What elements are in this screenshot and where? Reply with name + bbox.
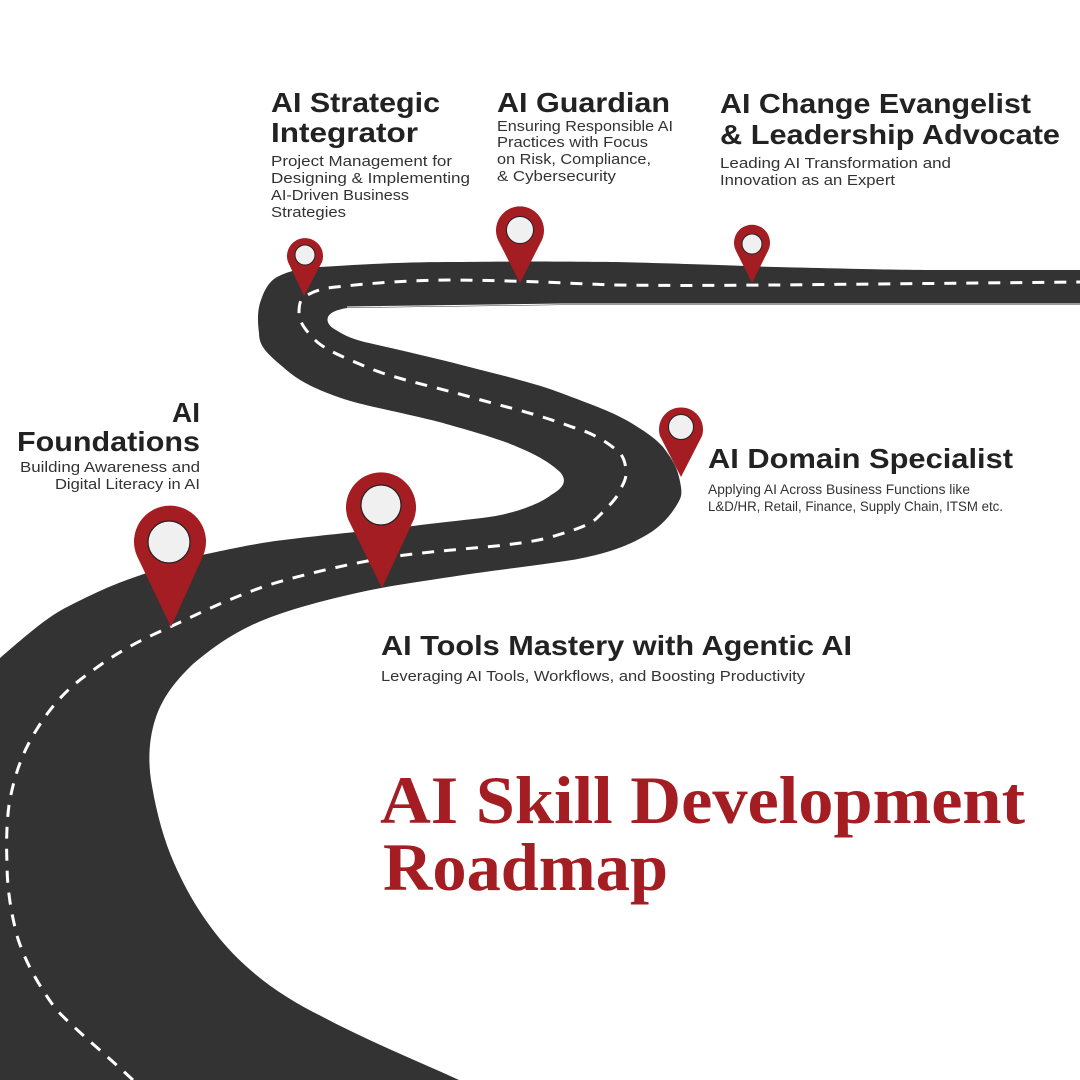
text: AI Domain Specialist [708,443,1013,514]
text: AI Tools Mastery [381,630,852,685]
text: AI Guardian: & Cybersecurity [497,169,617,185]
text: AI Guardian: AI Guardian [497,87,670,118]
text: AI Foundations [17,397,200,493]
text: AI Strategic Integrator: Project Management for [271,153,452,170]
title: AI Skill Development [380,762,1025,838]
text: AI Guardian: Ensuring Responsible AI [497,119,673,135]
text: AI Strategic Integrator: Integrator [271,117,418,148]
text: AI Change Evangelist: & Leadership Advocate [720,119,1060,150]
road center dashed line [7,280,1080,1080]
text: AI Domain Specialist: L&D/HR, Retail, Finance, Supply Chain, ITSM etc. [708,498,1003,514]
text: AI Guardian [497,87,673,185]
text: AI Guardian: Practices with Focus [497,135,648,151]
text: AI Strategic Integrator: Strategies [271,204,346,221]
pin: AI Foundations [134,506,206,627]
text: AI Change Evangelist [720,88,1060,189]
text: AI Change Evangelist: AI Change Evangelist [720,88,1031,119]
text: AI Strategic Integrator [271,87,470,221]
text: AI Foundations: Digital Literacy in AI [55,476,200,493]
text: AI Foundations: Building Awareness and [20,459,200,476]
pin: AI Tools Mastery [346,472,416,588]
text: AI Foundations: Foundations [17,426,200,457]
text: AI Domain Specialist: Applying AI Across Business Functions like [708,481,970,497]
text: AI Strategic Integrator: Designing & Implementing [271,170,470,187]
text: AI Domain Specialist: AI Domain Specialist [708,443,1013,474]
pin: AI Change Evangelist [734,225,770,283]
text: AI Guardian: on Risk, Compliance, [497,152,651,168]
title: Roadmap [383,829,668,905]
text: AI Strategic Integrator: AI Strategic [271,87,440,118]
pin: AI Strategic Integrator [287,238,323,296]
text: AI Change Evangelist: Leading AI Transformation and [720,155,951,172]
text: AI Change Evangelist: Innovation as an Expert [720,172,896,189]
text: AI Strategic Integrator: AI-Driven Business [271,187,409,204]
title [380,762,1025,905]
pin: AI Domain Specialist [659,407,703,477]
road [0,262,1080,1080]
pin: AI Guardian [496,206,544,283]
text: AI Tools Mastery: Leveraging AI Tools, Workflows, and Boosting Productivity [381,668,806,685]
text: AI Tools Mastery: AI Tools Mastery with Agentic AI [381,630,852,661]
text: AI Foundations: AI [172,397,200,428]
